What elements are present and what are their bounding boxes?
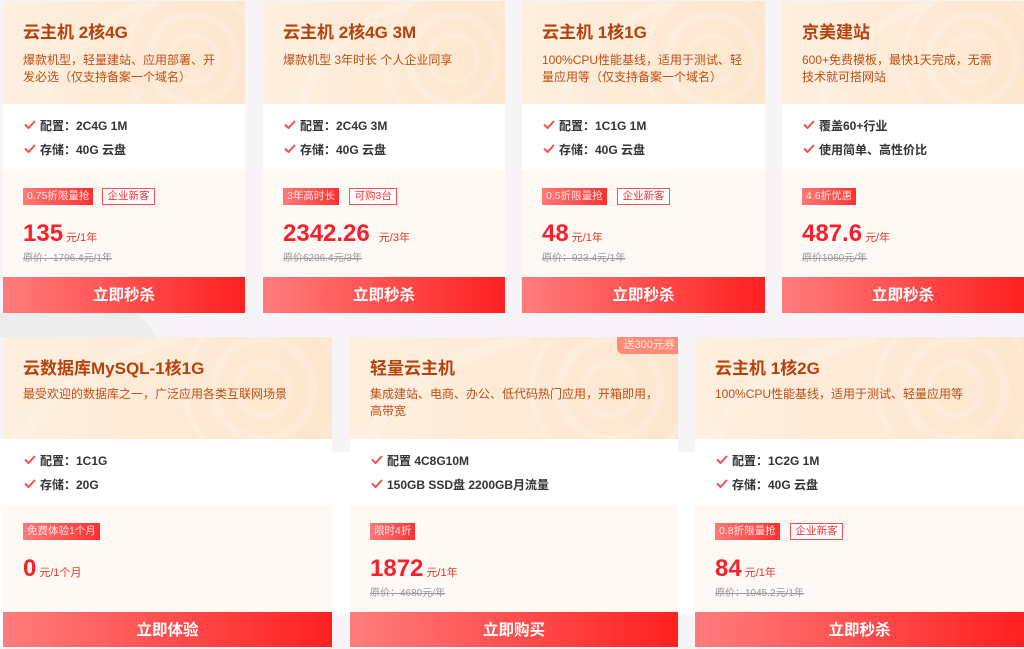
panel: 云主机 1核2G (695, 337, 1024, 647)
config: 配置：1C2G 1M (732, 454, 819, 468)
original price: 原价：1796.4元/1年 (23, 253, 112, 264)
tag (370, 523, 415, 540)
storage: 存储：40G 云盘 (300, 143, 386, 157)
icon: check (24, 479, 36, 488)
storage: 存储：40G 云盘 (40, 143, 126, 157)
title: 云主机 1核2G (715, 359, 820, 378)
icon: check (803, 144, 815, 153)
description: 600+免费模板，最快1天完成，无需技术就可搭网站 (802, 53, 992, 84)
button: 立即秒杀 (828, 622, 890, 639)
tag (617, 188, 670, 205)
tag (102, 188, 155, 205)
tag (790, 523, 843, 540)
config: 配置：1C1G (40, 454, 107, 468)
tag (349, 188, 397, 205)
header (3, 1, 245, 104)
header (522, 1, 765, 104)
tag (283, 188, 339, 205)
icon: check (543, 120, 555, 129)
config: 配置：1C1G 1M (559, 119, 646, 133)
button: 立即体验 (136, 622, 198, 639)
tag: 免费体验1个月 (27, 525, 96, 537)
config: 配置 4C8G10M (387, 454, 469, 468)
price: 48 元/1年 (542, 220, 603, 247)
feature: 覆盖60+行业 (819, 119, 887, 133)
panel: 云主机 2核4G (3, 1, 245, 313)
description: 爆款机型 3年时长 个人企业同享 (283, 53, 452, 67)
header (695, 337, 1024, 439)
storage: 存储：40G 云盘 (732, 478, 818, 492)
panel: 云数据库MySQL (3, 337, 332, 647)
icon: check (716, 455, 728, 464)
storage: 150GB SSD盘 2200GB月流量 (387, 478, 549, 492)
header (263, 1, 505, 104)
features (716, 454, 819, 492)
tag: 0.5折限量抢 (546, 190, 603, 202)
tag (23, 523, 100, 540)
button: 立即秒杀 (353, 287, 415, 304)
features (24, 119, 127, 157)
original price: 原价1060元/年 (802, 253, 867, 264)
corner badge (617, 337, 678, 354)
button (782, 277, 1024, 313)
price: 84 元/1年 (715, 555, 776, 582)
panel: 京美建站 (782, 1, 1024, 313)
title: 云主机 1核1G (542, 23, 647, 42)
tag: 限时4折 (374, 525, 411, 537)
button (263, 277, 505, 313)
tag (542, 188, 607, 205)
button (3, 612, 332, 647)
price: 0 元/1个月 (23, 555, 82, 582)
price area (263, 170, 505, 277)
tag: 0.75折限量抢 (27, 190, 89, 202)
header (350, 337, 678, 439)
description: 最受欢迎的数据库之一，广泛应用各类互联网场景 (23, 387, 287, 401)
button: 立即秒杀 (872, 287, 934, 304)
original price: 原价6296.4元/3年 (283, 253, 362, 264)
icon: check (543, 144, 555, 153)
icon: check (24, 455, 36, 464)
features (24, 454, 107, 492)
icon: check (803, 120, 815, 129)
tag: 企业新客 (622, 190, 664, 202)
button (350, 612, 678, 647)
storage: 存储：20G (40, 478, 99, 492)
panel: 云主机 1核1G (522, 1, 765, 313)
icon: check (716, 479, 728, 488)
icon: check (371, 455, 383, 464)
tag (23, 188, 93, 205)
icon: check (284, 144, 296, 153)
header (782, 1, 1024, 104)
button (522, 277, 765, 313)
features (371, 454, 549, 492)
price area (782, 170, 1024, 277)
features (803, 119, 927, 157)
button (3, 277, 245, 313)
title: 云主机 2核4G 3M (283, 23, 416, 42)
original price: 原价：923.4元/1年 (542, 253, 625, 264)
description: 100%CPU性能基线，适用于测试、轻量应用等（仅支持备案一个域名） (542, 53, 742, 84)
panel: 云主机 2核4G 3M (263, 1, 505, 313)
panel: 轻量云主机 (350, 337, 678, 647)
features (543, 119, 646, 157)
tag: 4.6折优惠 (806, 190, 852, 202)
icon: check (371, 479, 383, 488)
tag: 3年高时长 (287, 190, 335, 202)
tag (715, 523, 780, 540)
icon: check (24, 144, 36, 153)
header (3, 337, 332, 439)
description: 集成建站、电商、办公、低代码热门应用，开箱即用，高带宽 (370, 387, 658, 418)
button: 立即购买 (483, 622, 545, 639)
feature: 使用简单、高性价比 (819, 143, 927, 157)
button: 立即秒杀 (612, 287, 674, 304)
features (284, 119, 387, 157)
title: 京美建站 (802, 23, 870, 42)
description: 100%CPU性能基线，适用于测试、轻量应用等 (715, 387, 963, 401)
title: 云数据库MySQL-1核1G (23, 359, 204, 378)
tag (802, 188, 856, 205)
original price: 原价：1045.2元/1年 (715, 588, 804, 599)
tag: 可购3台 (354, 190, 392, 202)
storage: 存储：40G 云盘 (559, 143, 645, 157)
config: 配置：2C4G 1M (40, 119, 127, 133)
icon: check (284, 120, 296, 129)
price area (3, 170, 245, 277)
price: 1872 元/1年 (370, 555, 458, 582)
price: 487.6 元/年 (802, 220, 890, 247)
title: 轻量云主机 (370, 359, 455, 378)
price area (522, 170, 765, 277)
tag: 0.8折限量抢 (719, 525, 776, 537)
tag: 企业新客 (108, 190, 150, 202)
price: 2342.26 元/3年 (283, 220, 410, 247)
price area (3, 505, 332, 612)
price: 135 元/1年 (23, 220, 97, 247)
price area (695, 505, 1024, 612)
description: 爆款机型，轻量建站、应用部署、开发必选（仅支持备案一个域名） (23, 53, 215, 84)
config: 配置：2C4G 3M (300, 119, 387, 133)
tag: 企业新客 (796, 525, 838, 537)
icon: check (24, 120, 36, 129)
button (695, 612, 1024, 647)
title: 云主机 2核4G (23, 23, 128, 42)
price area (350, 505, 678, 612)
button: 立即秒杀 (93, 287, 155, 304)
original price: 原价：4680元/年 (370, 588, 445, 599)
corner badge: 送300元券 (624, 339, 675, 351)
